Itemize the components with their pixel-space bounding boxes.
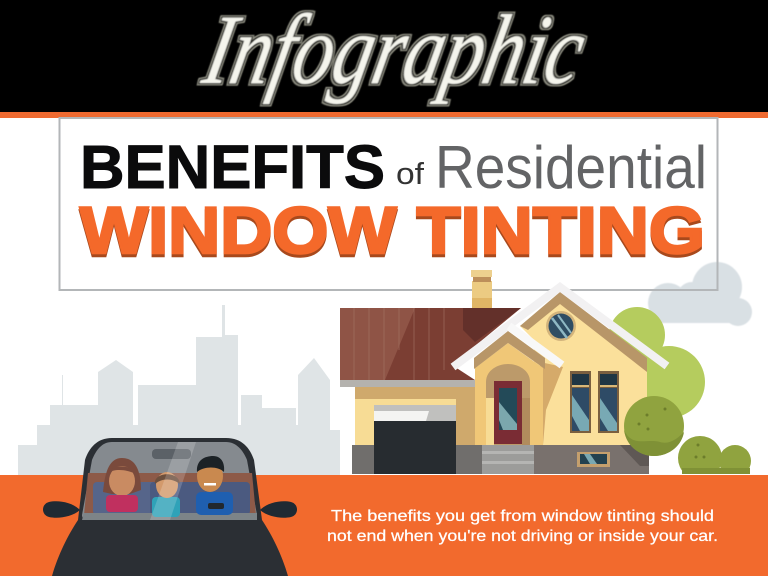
main roof	[340, 308, 521, 387]
windshield	[82, 442, 257, 520]
cloud	[648, 262, 752, 326]
garage door	[374, 405, 456, 474]
title line: Window Tinting: WINDOW TINTING	[80, 193, 705, 267]
car	[43, 438, 297, 576]
title line: Benefits of Residential: of	[396, 156, 424, 191]
car mirrors	[43, 501, 297, 518]
car interior	[82, 473, 257, 520]
porch shade wall	[534, 362, 563, 445]
foundation	[352, 445, 649, 474]
footer text: not end when you're not driving or inside your car.	[327, 528, 718, 545]
rearview mirror	[152, 449, 191, 459]
title frame	[60, 118, 718, 290]
round window	[546, 311, 576, 341]
basement window	[577, 452, 610, 467]
house	[340, 270, 667, 474]
boy	[152, 472, 180, 517]
chimney	[471, 270, 492, 319]
city skyline	[18, 305, 340, 475]
gable shade	[520, 292, 647, 372]
gable wall	[520, 296, 647, 445]
title line: Benefits of Residential	[80, 133, 707, 201]
bushes	[624, 396, 751, 480]
white roof trim	[453, 287, 667, 367]
front door	[494, 381, 522, 444]
woman	[103, 458, 141, 512]
orange footer band	[0, 475, 768, 576]
garage wall	[355, 387, 475, 445]
car body	[52, 438, 288, 576]
side windows	[570, 371, 619, 433]
footer text: The benefits you get from window tinting should	[331, 508, 714, 525]
porch	[474, 331, 545, 445]
porch steps	[482, 445, 534, 474]
man	[196, 456, 233, 515]
trees behind house	[609, 307, 705, 430]
title line: Benefits of Residential: BENEFITS	[80, 133, 385, 201]
header band	[0, 0, 768, 118]
title line: Benefits of Residential: Residential	[435, 134, 707, 201]
footer text	[327, 508, 718, 545]
windshield glare	[150, 442, 196, 520]
